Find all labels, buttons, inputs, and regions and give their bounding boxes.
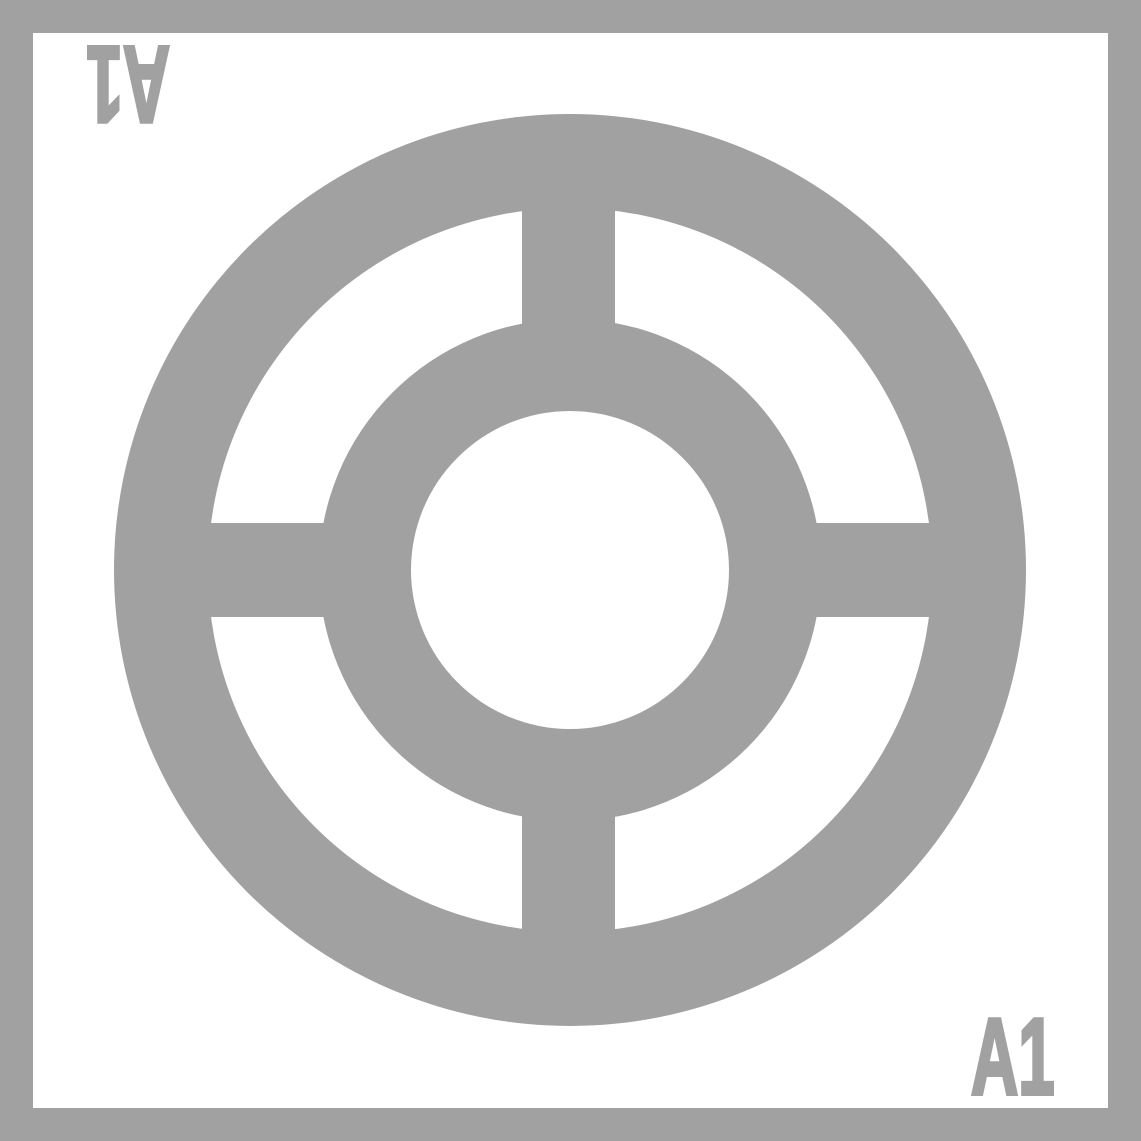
label: A1 top left rotated: A1 bbox=[86, 23, 170, 144]
target symbol bbox=[114, 114, 1026, 1026]
label: A1 bottom right: A1 bbox=[971, 997, 1055, 1118]
